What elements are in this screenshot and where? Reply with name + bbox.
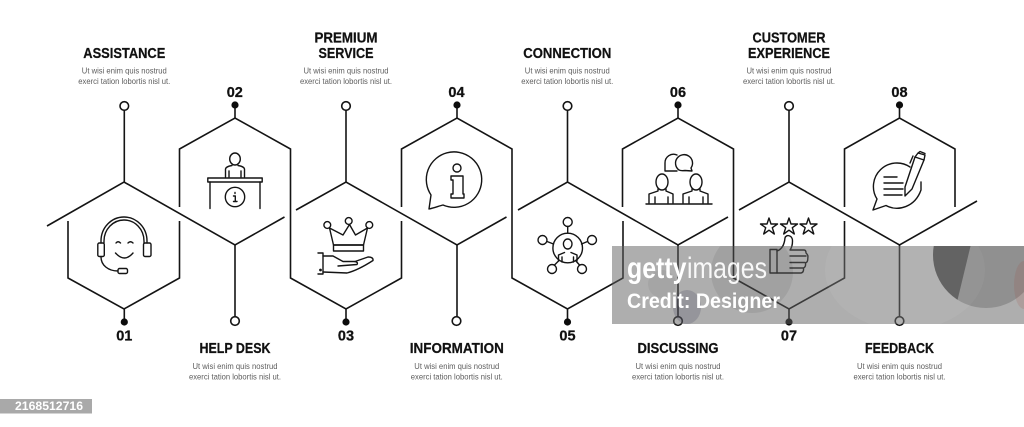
icon: info speech bubble bbox=[426, 152, 482, 209]
stock photo watermark: getty bbox=[627, 252, 687, 285]
text: premium service description: Ut wisi enim quis nostrud bbox=[304, 66, 389, 76]
heading: feedback: FEEDBACK bbox=[865, 341, 934, 357]
heading: customer experience: CUSTOMER bbox=[752, 31, 826, 47]
image id tag: 2168512716 bbox=[15, 399, 83, 413]
text: premium service description: exerci tation lobortis nisl ut. bbox=[300, 76, 392, 86]
step 02 markers bbox=[231, 101, 239, 325]
icon: speech bubble with pen bbox=[873, 152, 925, 210]
heading: customer experience bbox=[748, 31, 830, 62]
text: connection description: exerci tation lobortis nisl ut. bbox=[521, 76, 613, 86]
text: connection description bbox=[521, 66, 613, 86]
text: connection description: Ut wisi enim quis nostrud bbox=[525, 66, 610, 76]
number 02: 02 bbox=[227, 85, 243, 101]
text: feedback description bbox=[854, 361, 946, 382]
heading: premium service: SERVICE bbox=[318, 46, 374, 62]
step 07 markers bbox=[785, 102, 793, 326]
stock photo watermark: Credit: Designer bbox=[627, 290, 780, 313]
heading: information: INFORMATION bbox=[410, 341, 504, 357]
step 04 markers bbox=[452, 101, 461, 325]
text: assistance description: exerci tation lobortis nisl ut. bbox=[78, 76, 170, 86]
step 05 markers bbox=[563, 102, 572, 326]
icon: two people discussing bbox=[646, 154, 712, 204]
heading: premium service bbox=[314, 31, 378, 62]
text: discussing description bbox=[632, 361, 724, 382]
number 03: 03 bbox=[338, 328, 354, 344]
heading: help desk: HELP DESK bbox=[200, 341, 271, 357]
text: assistance description bbox=[78, 66, 170, 86]
icon: three stars and thumbs up bbox=[760, 218, 817, 273]
step 01 markers bbox=[120, 102, 129, 326]
number 01: 01 bbox=[116, 328, 132, 344]
number 05: 05 bbox=[559, 328, 576, 344]
text: feedback description: Ut wisi enim quis nostrud bbox=[857, 361, 942, 371]
text: assistance description: Ut wisi enim quis nostrud bbox=[82, 66, 167, 76]
text: discussing description: exerci tation lobortis nisl ut. bbox=[632, 372, 724, 382]
text: premium service description bbox=[300, 66, 392, 86]
number 07: 07 bbox=[781, 328, 797, 344]
heading: assistance: ASSISTANCE bbox=[83, 46, 166, 62]
number 08: 08 bbox=[891, 85, 908, 101]
step 03 markers bbox=[342, 102, 350, 326]
number 04: 04 bbox=[448, 85, 465, 101]
text: help desk description bbox=[189, 361, 281, 382]
icon: crown over hand bbox=[318, 218, 373, 274]
step 06 markers bbox=[674, 101, 682, 325]
heading: connection: CONNECTION bbox=[523, 46, 611, 62]
text: help desk description: Ut wisi enim quis nostrud bbox=[192, 361, 278, 371]
stock photo watermark: images bbox=[687, 252, 767, 285]
icon: help desk person bbox=[208, 153, 262, 208]
text: customer experience description: exerci tation lobortis nisl ut. bbox=[743, 76, 835, 86]
number 06: 06 bbox=[670, 85, 686, 101]
step 08 markers bbox=[895, 101, 904, 325]
heading: discussing: DISCUSSING bbox=[638, 341, 718, 357]
text: discussing description: Ut wisi enim quis nostrud bbox=[636, 361, 721, 371]
icon: network of people bbox=[538, 218, 596, 274]
heading: premium service: PREMIUM bbox=[314, 31, 378, 47]
heading: customer experience: EXPERIENCE bbox=[748, 46, 830, 62]
text: information description: Ut wisi enim quis nostrud bbox=[414, 361, 499, 371]
icon: smiling headset agent bbox=[98, 217, 151, 274]
text: information description: exerci tation lobortis nisl ut. bbox=[411, 372, 503, 382]
text: help desk description: exerci tation lobortis nisl ut. bbox=[189, 372, 281, 382]
hexagon chain outline bbox=[47, 118, 977, 309]
stock photo watermark bbox=[612, 246, 1024, 324]
text: feedback description: exerci tation lobortis nisl ut. bbox=[854, 372, 946, 382]
text: customer experience description bbox=[743, 66, 835, 86]
text: information description bbox=[411, 361, 503, 382]
text: customer experience description: Ut wisi enim quis nostrud bbox=[746, 66, 832, 76]
